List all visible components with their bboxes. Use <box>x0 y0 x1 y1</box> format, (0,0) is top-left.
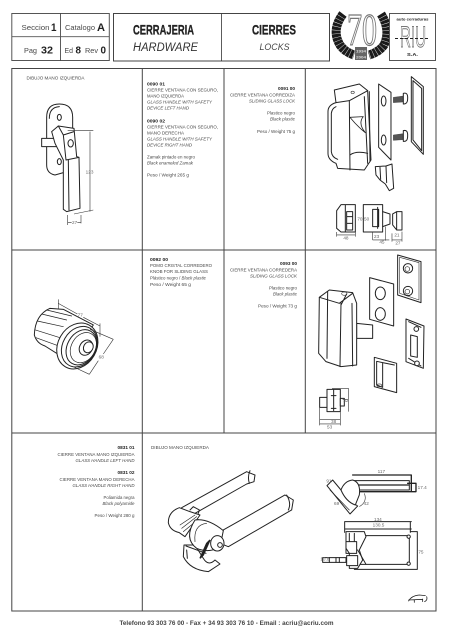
icon: top view <box>326 469 427 514</box>
panel: 0090 text: CIERRE VENTANA CON SEGURO, <box>147 124 218 130</box>
panel: 0091 text: SLIDING GLASS LOCK <box>249 98 296 104</box>
panel: 0090 text: MANO DERECHA <box>147 130 185 136</box>
icon: screw plate <box>398 255 421 303</box>
icon: lock body <box>319 290 373 367</box>
panel: 0090 text: Black enameled Zamak <box>147 160 194 166</box>
icon: dimension view: 32 <box>343 398 349 403</box>
icon: window handle with dimensions: 27 <box>72 220 78 225</box>
panel: 0831 text: CIERRE VENTANA MANO IZQUIERDA <box>58 452 135 457</box>
panel: 0092 text: Plástico negro / Black plastic <box>150 276 207 280</box>
icon: double glass handle <box>168 471 293 572</box>
panel: 0831 text <box>58 445 135 518</box>
panel: 0091 text: 0091 00 <box>278 86 295 91</box>
logo: 70 years wreath: 2004 <box>356 54 367 60</box>
icon: side view <box>320 517 424 569</box>
panel: 0092 text: KNOB FOR SLIDING GLASS <box>150 269 208 274</box>
product table grid <box>12 68 436 611</box>
logo: RIU box <box>390 14 436 60</box>
header: document reference box: Seccion <box>22 23 50 32</box>
icon: lock body <box>328 84 371 170</box>
panel: 0090 text: CIERRE VENTANA CON SEGURO, <box>147 88 218 92</box>
panel: 0090 handle drawing <box>26 76 94 225</box>
panel: 0093 text: Black plastic <box>273 292 298 296</box>
icon: dimension view: 53 <box>327 425 333 430</box>
icon: side view: 134 <box>374 517 382 522</box>
panel: 0090 text <box>147 82 218 178</box>
header: document reference box: Ed <box>64 46 73 55</box>
panel: 0091 text: Peso / Weight 75 g <box>257 129 295 134</box>
header: document reference box: 32 <box>41 44 53 56</box>
icon: signature <box>409 595 427 602</box>
icon: dimension view <box>320 388 349 430</box>
icon: plate with holes <box>370 278 394 326</box>
panel: 0091 lock exploded drawing <box>328 77 423 245</box>
icon: top view: 91 <box>326 478 332 483</box>
icon: window handle with dimensions: 123 <box>86 169 94 174</box>
panel: 0831 text: 0831 02 <box>118 470 135 475</box>
panel: 0831 text: Black polyamide <box>102 501 135 506</box>
icon: dimension views: 45 <box>379 240 385 245</box>
icon: dimension views <box>337 205 402 245</box>
title: cierres: CIERRES <box>252 22 296 38</box>
panel: 0090 text: Peso / Weight 265 g <box>147 172 189 178</box>
panel: 0090 text: GLASS HANDLE WITH SAFETY <box>147 100 213 104</box>
header: document reference box: 8 <box>76 44 81 56</box>
panel: 0092 knob drawing <box>34 299 113 376</box>
icon: back plate <box>379 84 391 160</box>
icon: dimension views: 23 <box>374 234 380 239</box>
logo: 70 years wreath <box>336 5 387 60</box>
panel: 0090 text: MANO IZQUIERDA <box>147 94 185 98</box>
panel: 0090 text: DEVICE LEFT HAND <box>147 106 190 110</box>
footer contact line: Telefono 93 303 76 00 - Fax + 34 93 303 76 10 - Email : acriu@acriu.com <box>120 620 334 627</box>
panel: 0092 text <box>150 257 212 287</box>
logo: RIU box: RIU <box>400 21 426 54</box>
icon: window handle with dimensions <box>42 104 94 225</box>
panel: 0090 text: 0090 01 <box>147 82 165 86</box>
icon: side view: 75 <box>418 549 424 554</box>
drawing note: DIBUJO MANO IZQUIERDA <box>26 76 85 80</box>
icon: side view: 130.5 <box>373 522 385 527</box>
header: document reference box: A <box>97 22 105 34</box>
panel: 0091 text: Plastico negro <box>267 110 295 116</box>
icon: top view: 42 <box>364 501 369 506</box>
panel: 0093 text: Peso / Weight 73 g <box>258 304 297 308</box>
icon: knob dimensions: 77 <box>78 313 83 318</box>
panel: 0093 lock exploded drawing <box>319 255 424 430</box>
logo: RIU box: auto cerraduras <box>396 18 429 22</box>
logo: 70 years wreath: 70 <box>347 5 377 55</box>
icon: knob dimensions: 68 <box>99 354 104 359</box>
panel: 0092 text: Peso / Weight 65 g <box>150 282 191 287</box>
icon: glass knob <box>34 308 106 376</box>
header: document reference box: Rev <box>85 46 98 55</box>
icon: dimension view: 38 <box>331 419 337 424</box>
subtitle: locks: LOCKS <box>260 42 290 52</box>
icon: dimension views: 70 <box>357 217 363 222</box>
panel: 0831 text: 0831 01 <box>118 445 135 450</box>
panel: 0831 text: GLASS HANDLE LEFT HAND <box>76 458 135 463</box>
icon: screws <box>393 93 408 141</box>
icon: knob dimensions <box>58 299 113 374</box>
icon: small knob piece <box>375 164 394 191</box>
panel: 0831 text: CIERRE VENTANA MANO DERECHA <box>60 477 135 482</box>
panel: 0093 text: 0093 00 <box>280 261 297 266</box>
icon: dimension views: 27 <box>395 240 401 245</box>
panel: 0091 text: Black plastic <box>270 116 296 122</box>
panel: 0093 text: Plastico negro <box>269 286 297 290</box>
panel: 0831 text: Peso / Weight 280 g <box>94 513 135 518</box>
panel: 0092 text: POMO CRISTAL CORREDERO <box>150 263 212 268</box>
panel: 0091 text: CIERRE VENTANA CORREDIZA <box>230 92 296 98</box>
panel: 0831 dimension drawings <box>320 469 427 602</box>
panel: 0092 text: 0092 00 <box>150 257 168 262</box>
header: document reference box <box>12 14 109 60</box>
header: document reference box: 0 <box>100 44 106 56</box>
header: document reference box: Catalogo <box>65 23 95 32</box>
panel: 0090 text: GLASS HANDLE WITH SAFETY <box>147 136 213 142</box>
panel: 0093 text: SLIDING GLASS LOCK <box>250 274 298 278</box>
header: document reference box: 1 <box>51 22 56 34</box>
logo: 70 years wreath: 1934 <box>356 48 367 54</box>
icon: top view: 17.4 <box>418 485 427 490</box>
panel: 0091 text <box>230 86 296 134</box>
icon: dimension views: 48 <box>343 235 349 240</box>
icon: strike plate <box>406 319 424 368</box>
icon: glass frame <box>411 77 423 154</box>
note: left-hand drawing: DIBUJO MANO IZQUIERDA <box>151 445 210 450</box>
panel: 0090 text: 0090 02 <box>147 118 165 124</box>
title: cerrajeria: CERRAJERIA <box>133 22 194 38</box>
header: title box <box>114 14 330 61</box>
panel: 0831 text: GLASS HANDLE RIGHT HAND <box>72 483 135 488</box>
icon: top view: 117 <box>378 469 385 474</box>
panel: 0093 text: CIERRE VENTANA CORREDERA <box>230 268 298 272</box>
panel: 0090 text: Zamak pintado en negro <box>147 154 195 160</box>
logo: RIU box: S.A. <box>407 52 418 57</box>
panel: 0093 text <box>230 261 298 308</box>
panel: 0090 text: DEVICE RIGHT HAND <box>147 142 193 148</box>
header: document reference box: Pag <box>24 46 37 55</box>
icon: pull handle <box>374 357 397 393</box>
icon: dimension views: 50 <box>364 217 370 222</box>
icon: dimension views: 21 <box>394 232 400 237</box>
icon: side view: 10.8 <box>320 557 330 562</box>
subtitle: hardware: HARDWARE <box>133 42 198 54</box>
icon: top view: 69 <box>334 501 340 506</box>
panel: 0831 text: Poliamida negra <box>104 495 135 500</box>
